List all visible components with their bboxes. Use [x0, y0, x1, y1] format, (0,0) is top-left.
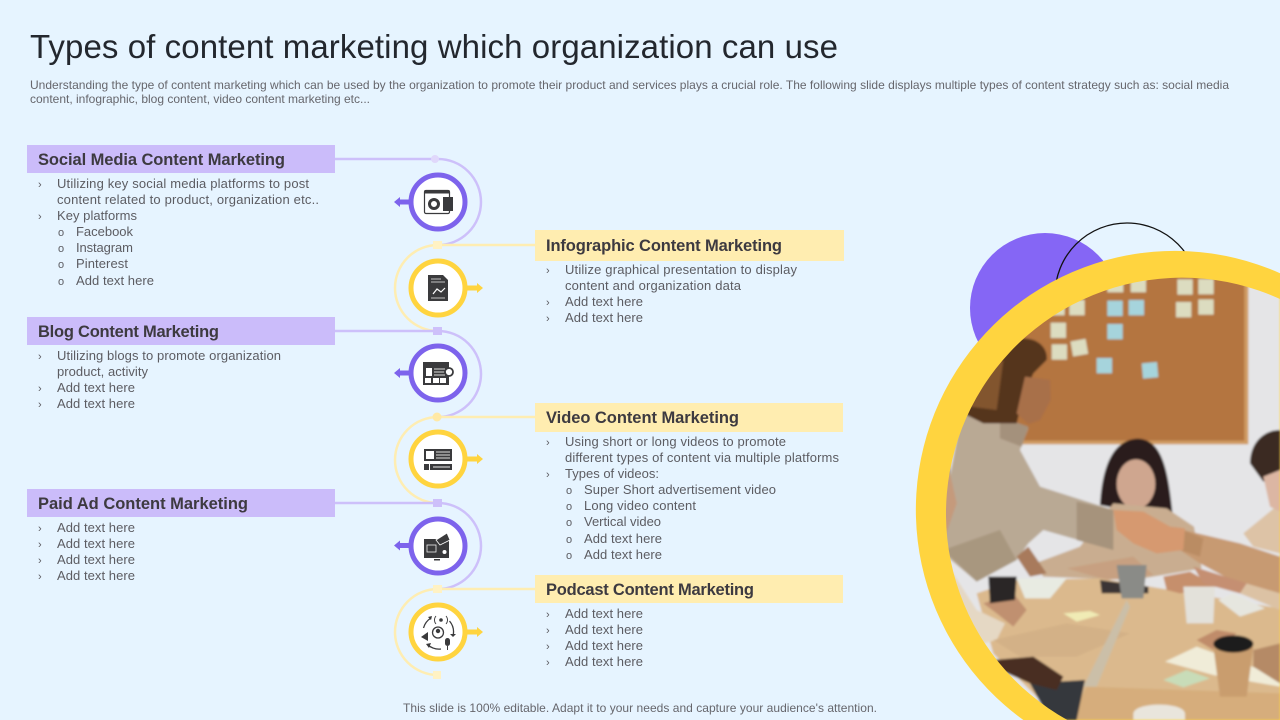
right person — [1180, 430, 1280, 610]
panel: infographic content marketing: › — [546, 265, 550, 277]
panel: blog content marketing: Utilizing blogs to promote organization — [57, 348, 281, 363]
panel: infographic content marketing — [535, 230, 844, 325]
panel: video content marketing — [535, 403, 843, 562]
panel: video content marketing: o — [566, 485, 572, 497]
panel: blog content marketing: Add text here — [57, 396, 135, 411]
standing woman — [940, 338, 1113, 582]
panel: podcast content marketing: › — [546, 609, 550, 621]
panel: paid ad content marketing: Add text here — [57, 536, 135, 551]
corkboard — [1000, 273, 1248, 444]
icon: paid ad megaphone screen — [394, 519, 465, 573]
panel: social media content marketing: Add text here — [76, 273, 154, 288]
panel: social media content marketing: content related to product, organization etc.. — [57, 192, 319, 207]
panel: video content marketing: o — [566, 550, 572, 562]
panel: social media content marketing: o — [58, 259, 64, 271]
panel: social media content marketing: Utilizing key social media platforms to post — [57, 176, 309, 191]
panel: paid ad content marketing: Add text here — [57, 568, 135, 583]
panel: infographic content marketing: Add text here — [565, 294, 643, 309]
panel: social media content marketing: › — [38, 211, 42, 223]
table — [976, 577, 1280, 698]
panel: video content marketing: Add text here — [584, 547, 662, 562]
panel: video content marketing: different types of content via multiple platforms — [565, 450, 840, 465]
decorative black arc — [1055, 223, 1199, 367]
panel: blog content marketing: › — [38, 383, 42, 395]
panel: video content marketing: Using short or long videos to promote — [565, 434, 786, 449]
panel: paid ad content marketing: Add text here — [57, 520, 135, 535]
panel: video content marketing: o — [566, 534, 572, 546]
panel: infographic content marketing: content and organization data — [565, 278, 742, 293]
footer note: This slide is 100% editable. Adapt it to your needs and capture your audience's attention. — [403, 701, 877, 715]
title: Types of content marketing which organization can use — [30, 28, 838, 65]
panel: podcast content marketing: Podcast Content Marketing — [546, 581, 754, 599]
panel: paid ad content marketing: › — [38, 555, 42, 567]
panel: podcast content marketing — [535, 575, 843, 669]
panel: video content marketing: Vertical video — [584, 514, 661, 529]
icon: blog page — [394, 346, 465, 400]
icon: video player — [411, 432, 483, 486]
panel: blog content marketing: › — [38, 351, 42, 363]
panel: paid ad content marketing: › — [38, 539, 42, 551]
panel: infographic content marketing: Utilize graphical presentation to display — [565, 262, 798, 277]
panel: podcast content marketing: › — [546, 641, 550, 653]
panel: social media content marketing: o — [58, 243, 64, 255]
icon: social media settings — [394, 175, 465, 229]
panel: paid ad content marketing — [27, 489, 335, 583]
panel: social media content marketing: › — [38, 179, 42, 191]
panel: paid ad content marketing: Paid Ad Content Marketing — [38, 495, 248, 513]
panel: blog content marketing: › — [38, 399, 42, 411]
description text — [30, 78, 1229, 106]
panel: video content marketing: o — [566, 501, 572, 513]
yellow photo ring — [916, 251, 1280, 720]
wall — [940, 273, 1280, 720]
panel: video content marketing: Long video content — [584, 498, 696, 513]
panel: social media content marketing: o — [58, 227, 64, 239]
panel: social media content marketing: Facebook — [76, 224, 134, 239]
panel: infographic content marketing: Infographic Content Marketing — [546, 237, 782, 255]
panel: social media content marketing — [27, 145, 335, 288]
panel: paid ad content marketing: › — [38, 523, 42, 535]
left man — [946, 464, 1027, 644]
panel: podcast content marketing: Add text here — [565, 606, 643, 621]
panel: blog content marketing: product, activity — [57, 364, 148, 379]
panel: video content marketing: Video Content Marketing — [546, 409, 739, 427]
description text: Understanding the type of content marketing which can be used by the organization to promote their product and services plays a crucial role. The following slide displays multiple types of content strategy such as: social media — [30, 78, 1229, 92]
panel: paid ad content marketing: Add text here — [57, 552, 135, 567]
handshake — [1113, 510, 1185, 553]
panel: social media content marketing: Pinterest — [76, 256, 128, 271]
panel: social media content marketing: Key platforms — [57, 208, 138, 223]
panel: video content marketing: o — [566, 517, 572, 529]
panel: podcast content marketing: Add text here — [565, 622, 643, 637]
panel: social media content marketing: o — [58, 276, 64, 288]
panel: podcast content marketing: › — [546, 657, 550, 669]
panel: podcast content marketing: Add text here — [565, 654, 643, 669]
panel: video content marketing: Types of videos: — [565, 466, 659, 481]
panel: podcast content marketing: Add text here — [565, 638, 643, 653]
panel: infographic content marketing: › — [546, 297, 550, 309]
panel: podcast content marketing: › — [546, 625, 550, 637]
panel: blog content marketing: Add text here — [57, 380, 135, 395]
icon: infographic document — [411, 261, 483, 315]
panel: infographic content marketing: › — [546, 313, 550, 325]
panel: blog content marketing: Blog Content Marketing — [38, 323, 219, 341]
panel: blog content marketing — [27, 317, 335, 411]
description text: content, infographic, blog content, video content marketing etc... — [30, 92, 370, 106]
table objects — [988, 565, 1280, 720]
decorative purple circle — [970, 233, 1120, 383]
panel: social media content marketing: Instagram — [76, 240, 133, 255]
panel: social media content marketing: Social Media Content Marketing — [38, 151, 285, 169]
panel: video content marketing: › — [546, 469, 550, 481]
team meeting photo — [940, 273, 1280, 720]
panel: video content marketing: › — [546, 437, 550, 449]
seated woman — [1035, 439, 1202, 580]
connector timeline — [335, 155, 535, 679]
panel: infographic content marketing: Add text here — [565, 310, 643, 325]
panel: video content marketing: Add text here — [584, 531, 662, 546]
panel: video content marketing: Super Short advertisement video — [584, 482, 776, 497]
panel: paid ad content marketing: › — [38, 571, 42, 583]
icon: podcast cycle — [411, 605, 483, 659]
